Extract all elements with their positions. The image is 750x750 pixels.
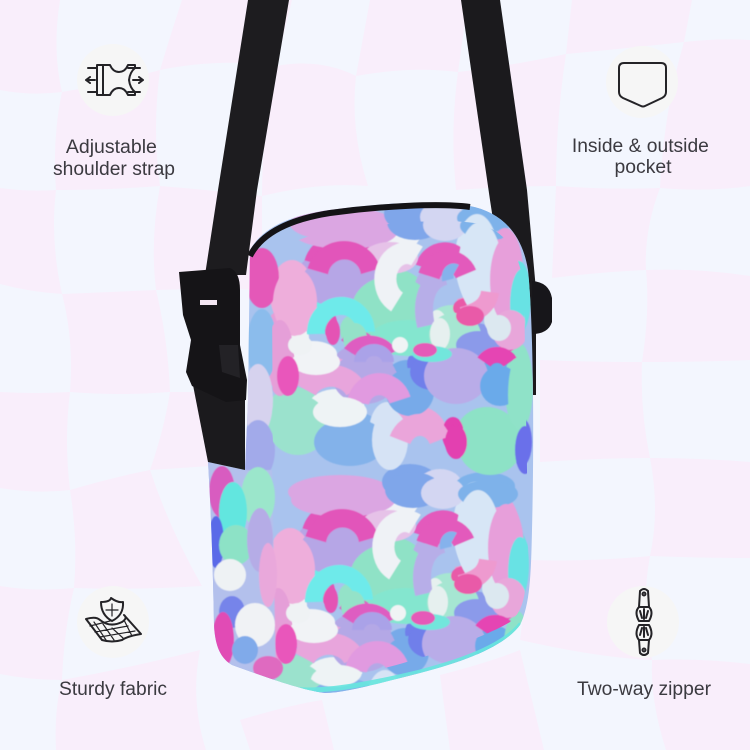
feature: adjustable shoulder strap bbox=[53, 44, 175, 180]
icon: pocket bbox=[606, 46, 678, 118]
label: shoulder strap bbox=[53, 159, 175, 180]
label: Adjustable bbox=[66, 137, 157, 158]
label: Two-way zipper bbox=[577, 679, 712, 700]
label: Inside & outside bbox=[572, 136, 709, 157]
side-release buckle bbox=[179, 268, 247, 402]
icon: buckle bbox=[77, 44, 149, 116]
bottom edge trim bbox=[272, 624, 521, 690]
front strap lower bbox=[192, 380, 245, 470]
back strap (right side) bbox=[461, 0, 536, 395]
bag body with painted arches bbox=[208, 203, 534, 693]
icon: zipper pulls bbox=[607, 586, 679, 658]
pocket pattern bbox=[200, 462, 283, 680]
zipper bbox=[250, 205, 470, 256]
feature: two-way zipper bbox=[577, 586, 712, 700]
icon: shield on fabric bbox=[77, 586, 149, 658]
right strap loop bbox=[532, 281, 552, 334]
piping and gusset pattern bbox=[245, 203, 533, 693]
feature: inside and outside pocket bbox=[572, 46, 714, 178]
label: Sturdy fabric bbox=[59, 679, 167, 700]
front panel pattern bbox=[272, 222, 528, 680]
front strap upper bbox=[205, 0, 289, 275]
label: pocket bbox=[614, 157, 672, 178]
feature: sturdy fabric bbox=[59, 586, 167, 700]
